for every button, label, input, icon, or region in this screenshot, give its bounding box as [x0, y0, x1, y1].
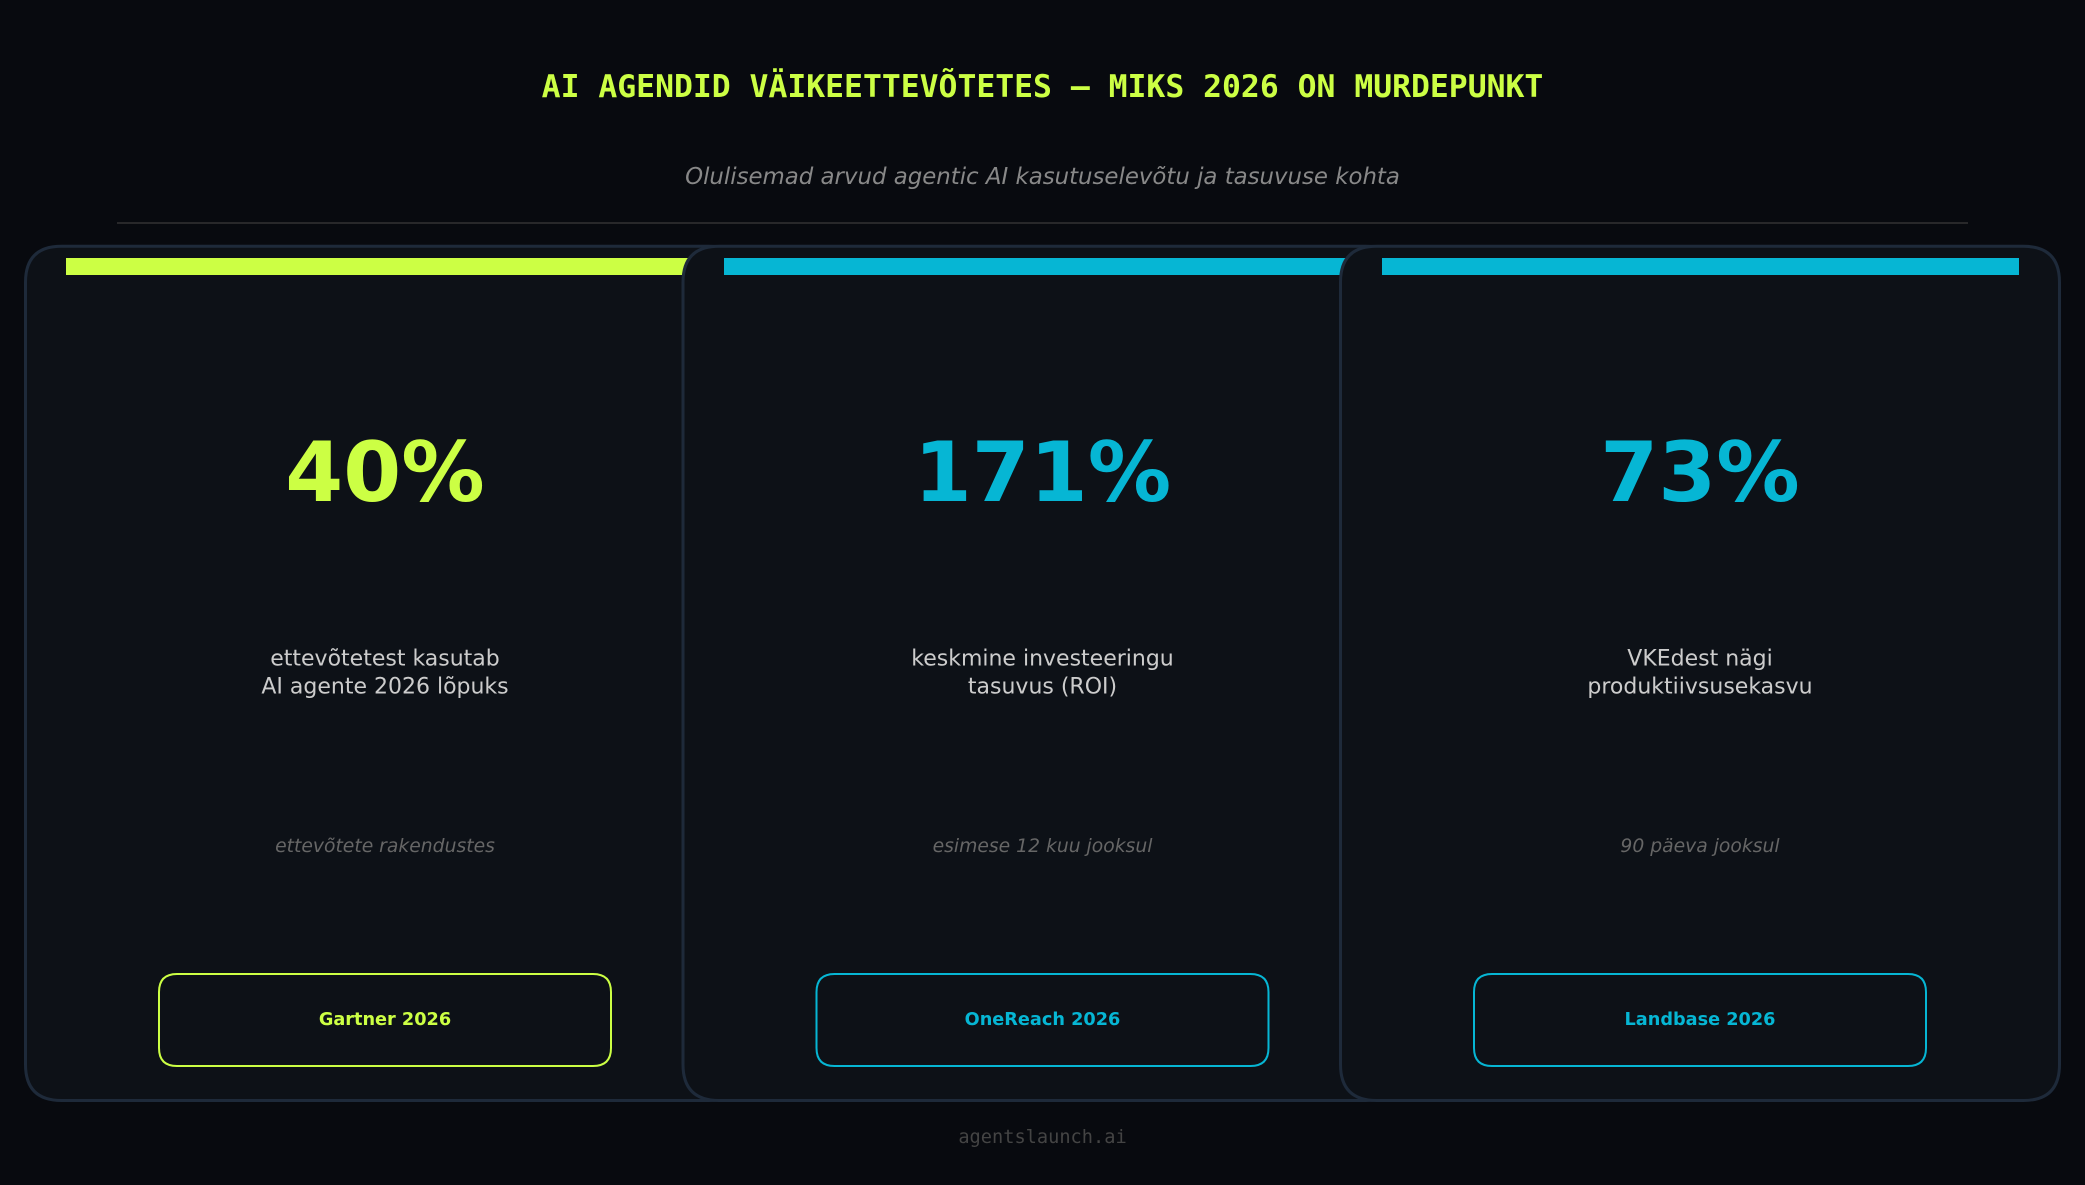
- card 2 source badge: OneReach 2026: [965, 1010, 1120, 1030]
- card 1 description: ettevõtetest kasutab: [270, 646, 500, 672]
- panel: card 3: [1340, 246, 2060, 1101]
- card 3 caption: 90 päeva jooksul: [1620, 836, 1780, 857]
- card 3 accent bar: [1382, 258, 2019, 275]
- card 2 background: [683, 246, 1402, 1101]
- card 2 description: tasuvus (ROI): [968, 674, 1117, 700]
- title: AI AGENDID VÄIKEETTEVÕTETES — MIKS 2026 ON MURDEPUNKT: [542, 66, 1543, 105]
- card 3 source badge: [1474, 974, 1926, 1066]
- card 1 big number: 40%: [285, 424, 485, 521]
- panel: card 2: [683, 246, 1402, 1101]
- card 2 caption: esimese 12 kuu jooksul: [933, 836, 1153, 857]
- card 1 caption: ettevõtete rakendustes: [275, 836, 495, 857]
- card 1 accent bar: [66, 258, 703, 275]
- card 3 description: produktiivsusekasvu: [1587, 674, 1813, 700]
- footer: agentslaunch.ai: [958, 1127, 1127, 1148]
- card 1 background: [26, 246, 745, 1101]
- subtitle: Olulisemad arvud agentic AI kasutuselevõtu ja tasuvuse kohta: [685, 164, 1400, 190]
- card 3 description: VKEdest nägi: [1627, 646, 1773, 672]
- card 1 description: AI agente 2026 lõpuks: [261, 674, 509, 700]
- card 2 accent bar: [724, 258, 1361, 275]
- card 2 description: keskmine investeeringu: [911, 646, 1174, 672]
- panel: card 1: [26, 246, 745, 1101]
- card 3 source badge: Landbase 2026: [1625, 1010, 1775, 1030]
- card 2 source badge: [816, 974, 1268, 1066]
- card 1 source badge: Gartner 2026: [319, 1010, 451, 1030]
- card 1 source badge: [159, 974, 611, 1066]
- card 3 big number: 73%: [1600, 424, 1800, 521]
- card 2 big number: 171%: [914, 424, 1171, 521]
- card 3 background: [1340, 246, 2060, 1101]
